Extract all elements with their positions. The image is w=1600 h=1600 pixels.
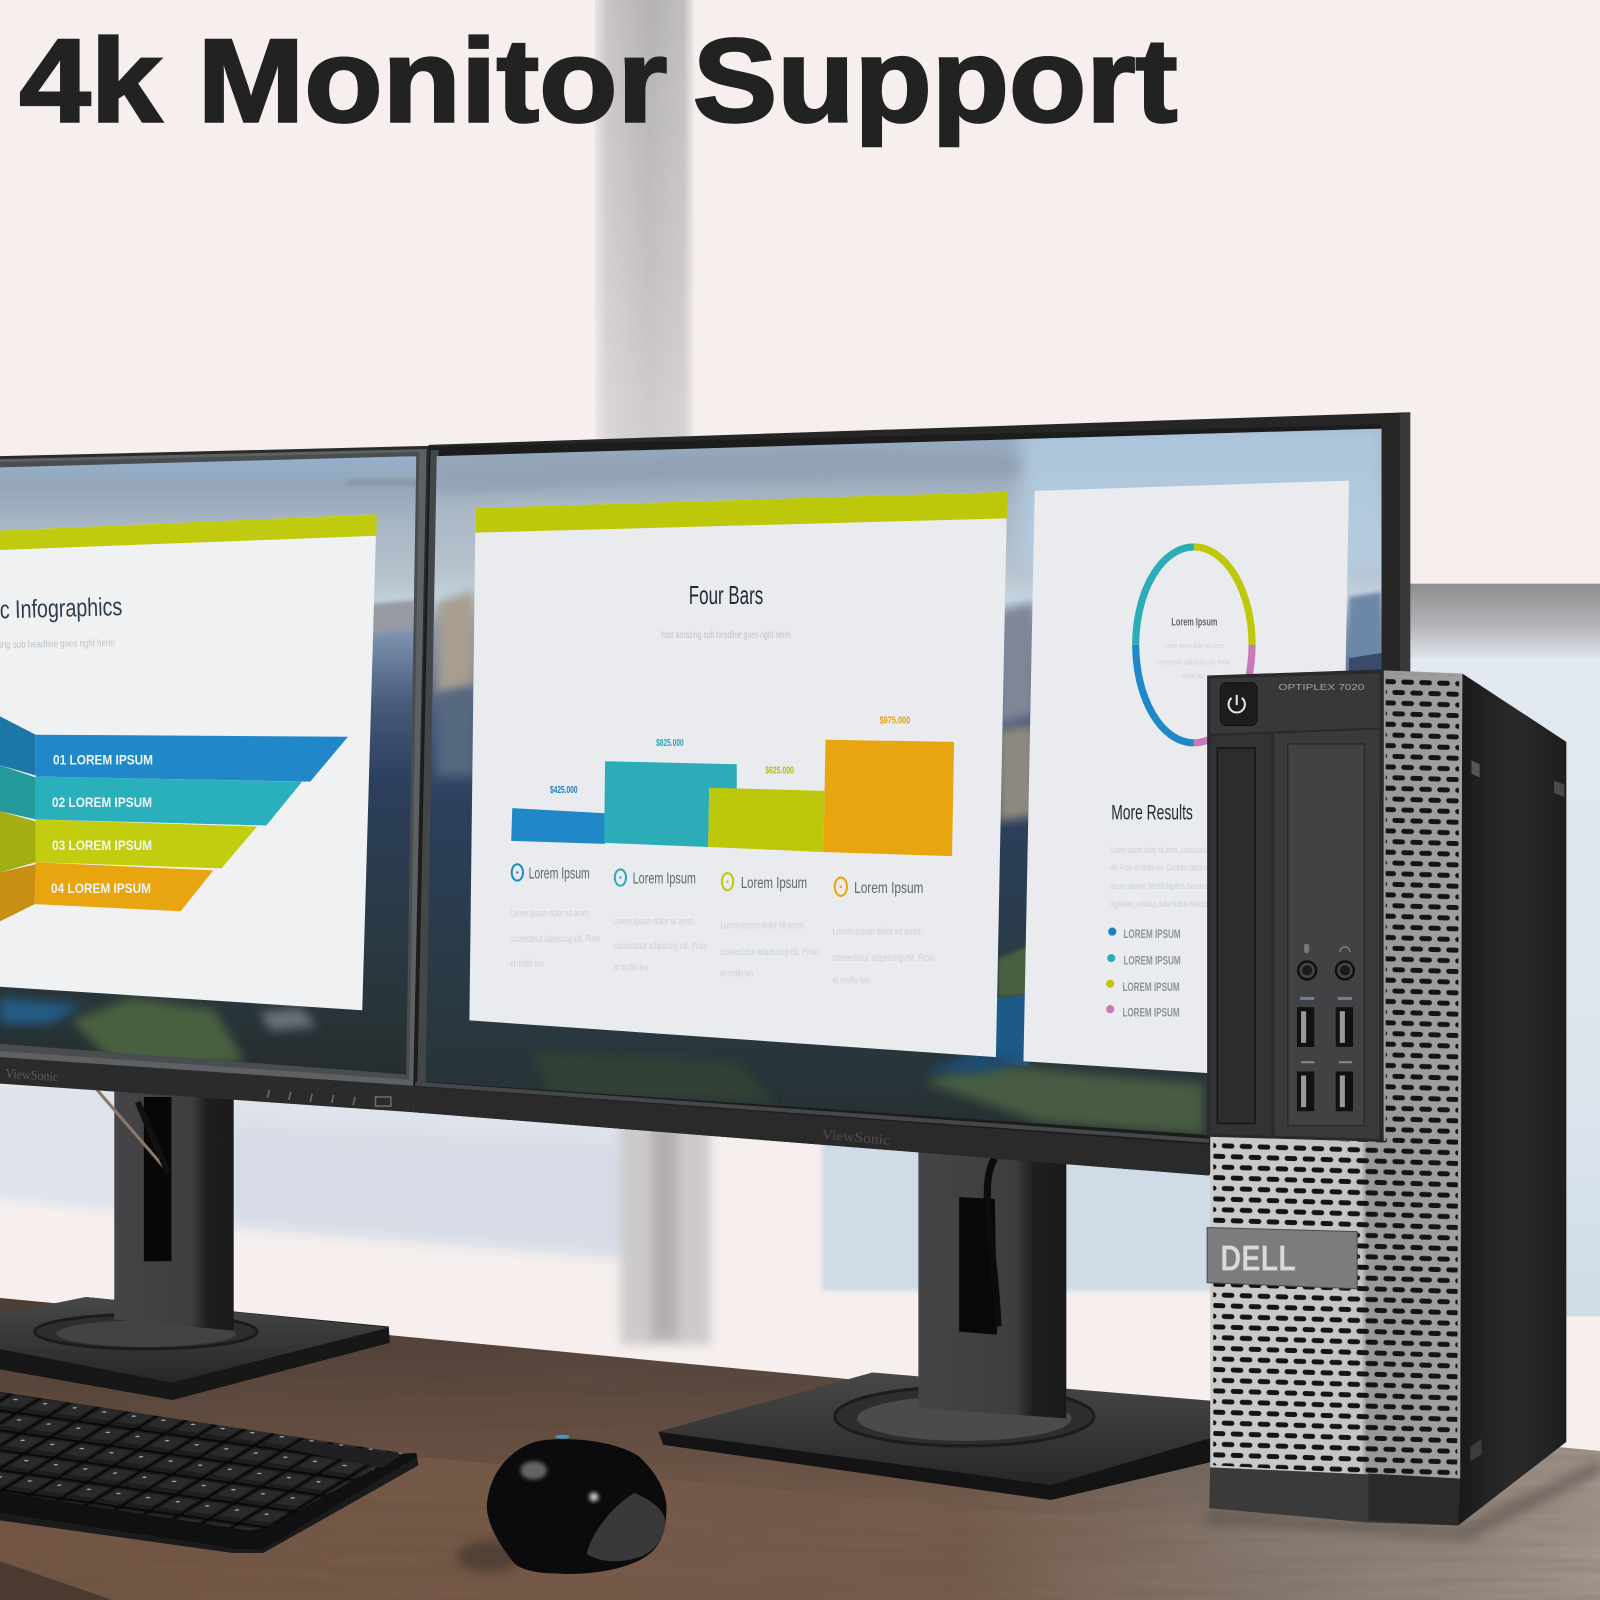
bar legend: orange: consectetur adipiscing elit. Proin bbox=[833, 953, 935, 964]
tower side panel bbox=[1458, 673, 1566, 1526]
desktop tower: Dell OptiPlex 7020 bbox=[1207, 669, 1566, 1526]
left slide green header bbox=[0, 514, 377, 550]
title bbox=[19, 15, 1178, 147]
keycaps bbox=[0, 1392, 403, 1531]
more results paragraph bbox=[1110, 845, 1209, 909]
left slide subheading: ing sub headline goes right here! bbox=[0, 638, 115, 651]
pyramid labels bbox=[51, 752, 153, 897]
keyboard bbox=[0, 1392, 418, 1553]
OptiPlex label: OPTIPLEX 7020 bbox=[1279, 682, 1365, 692]
more results legend: LOREM IPSUM bbox=[1123, 954, 1181, 967]
bar legend: orange: et mollis leo. bbox=[833, 976, 871, 987]
bar value labels: $825.000 bbox=[656, 738, 684, 749]
tower black bezel bbox=[1207, 669, 1384, 1142]
bar legend: orange bbox=[833, 878, 935, 987]
more results paragraph: Lorem ipsum dolor sit amet, consectetur bbox=[1110, 845, 1209, 855]
bar legend: orange: Lorem Ipsum bbox=[854, 880, 923, 897]
more results legend bbox=[1106, 928, 1181, 1019]
bar legend: blue: Lorem ipsum dolor sit amet, bbox=[510, 908, 590, 919]
bar value labels bbox=[550, 715, 910, 796]
tower front silver grille bbox=[1210, 670, 1462, 1479]
bar legend: blue bbox=[510, 864, 600, 969]
bar legend: blue: consectetur adipiscing elit. Proin bbox=[510, 934, 600, 945]
right monitor chin bbox=[413, 1087, 1209, 1176]
right monitor stand bbox=[658, 1148, 1214, 1500]
donut description: Lorem ipsum dolor sit amet, bbox=[1163, 642, 1224, 650]
bar chart bbox=[511, 715, 954, 856]
donut ring chart bbox=[1136, 547, 1252, 743]
pyramid labels: 03 LOREM IPSUM bbox=[52, 838, 152, 854]
right screen wallpaper bbox=[418, 423, 1388, 1158]
bar value labels: $975.000 bbox=[880, 715, 910, 726]
icon: power button bbox=[1220, 683, 1257, 726]
four bars green header bbox=[476, 492, 1007, 533]
bar legend: teal: consectetur adipiscing elit. Proin bbox=[613, 941, 707, 952]
slide: More Results bbox=[1023, 481, 1349, 1073]
more results paragraph: ipsum aliquet. Morbi dapibus faucibus bbox=[1110, 881, 1209, 891]
donut description: consectetur adipiscing elit. Proin bbox=[1156, 658, 1230, 666]
mouse bbox=[457, 1435, 667, 1574]
right monitor bbox=[413, 412, 1410, 1176]
more results legend: LOREM IPSUM bbox=[1122, 1006, 1180, 1019]
audio jacks bbox=[1297, 944, 1355, 981]
pyramid labels: 04 LOREM IPSUM bbox=[51, 881, 151, 897]
ViewSonic logo right: ViewSonic bbox=[821, 1127, 891, 1149]
grille perforations bbox=[1213, 673, 1459, 1479]
pyramid chart bbox=[0, 716, 348, 921]
left monitor bbox=[0, 446, 429, 1112]
more results legend: LOREM IPSUM bbox=[1123, 928, 1181, 941]
four bars subheading: Your amazing sub headline goes right here! bbox=[660, 630, 791, 641]
donut description bbox=[1156, 642, 1230, 681]
bar legend: orange: Lorem ipsum dolor sit amet, bbox=[833, 927, 922, 938]
tower black foot bbox=[1209, 1467, 1460, 1526]
desk surface bbox=[0, 1296, 1600, 1600]
bar legend: teal: Lorem ipsum dolor sit amet, bbox=[613, 916, 695, 927]
left slide panel bbox=[0, 514, 377, 1010]
bar legend: green: et mollis leo. bbox=[720, 969, 755, 980]
four bars heading: Four Bars bbox=[689, 582, 763, 610]
bezel top strip bbox=[1210, 673, 1380, 734]
ViewSonic logo left: ViewSonic bbox=[5, 1066, 59, 1084]
title: 4k Monitor bbox=[19, 15, 667, 147]
bar legend: blue: et mollis leo. bbox=[510, 958, 545, 969]
more results legend: LOREM IPSUM bbox=[1122, 981, 1180, 994]
more results paragraph: elit. Proin et mollis leo, Curabitur placerat bbox=[1110, 862, 1209, 872]
bar legend: green: Lorem Ipsum bbox=[741, 875, 807, 892]
bar legend: green bbox=[720, 873, 818, 980]
Dell badge: DELL bbox=[1220, 1238, 1296, 1278]
more results heading: More Results bbox=[1111, 800, 1193, 824]
donut center label: Lorem Ipsum bbox=[1171, 617, 1217, 629]
bar legend: blue: Lorem Ipsum bbox=[529, 866, 590, 883]
bar legend: green: consectetur adipiscing elit. Proin bbox=[720, 947, 818, 958]
left screen wallpaper bbox=[0, 456, 429, 1079]
bar legend: teal bbox=[613, 869, 707, 973]
pyramid labels: 01 LOREM IPSUM bbox=[53, 752, 153, 768]
bar value labels: $625.000 bbox=[765, 765, 794, 776]
title: Support bbox=[693, 15, 1178, 147]
bar value labels: $425.000 bbox=[550, 785, 578, 796]
left monitor stand bbox=[0, 1082, 390, 1400]
right port panel bbox=[1274, 730, 1380, 1139]
more results paragraph: dignissim, a finibus nulla finibus Nescipit bbox=[1110, 899, 1209, 909]
USB ports bbox=[1297, 997, 1353, 1111]
Dell badge bbox=[1207, 1228, 1357, 1289]
bar legend: green: Lorem ipsum dolor sit amet, bbox=[720, 921, 805, 932]
bar legend: teal: Lorem Ipsum bbox=[633, 871, 696, 888]
left slide heading: c Infographics bbox=[0, 593, 123, 624]
bar legend: teal: et mollis leo. bbox=[613, 962, 650, 973]
left drive door bbox=[1210, 734, 1271, 1136]
slide: Four Bars bbox=[469, 492, 1007, 1057]
monitor buttons bbox=[267, 1090, 391, 1106]
pyramid labels: 02 LOREM IPSUM bbox=[52, 795, 152, 811]
donut description: mollis leo. bbox=[1182, 673, 1206, 681]
